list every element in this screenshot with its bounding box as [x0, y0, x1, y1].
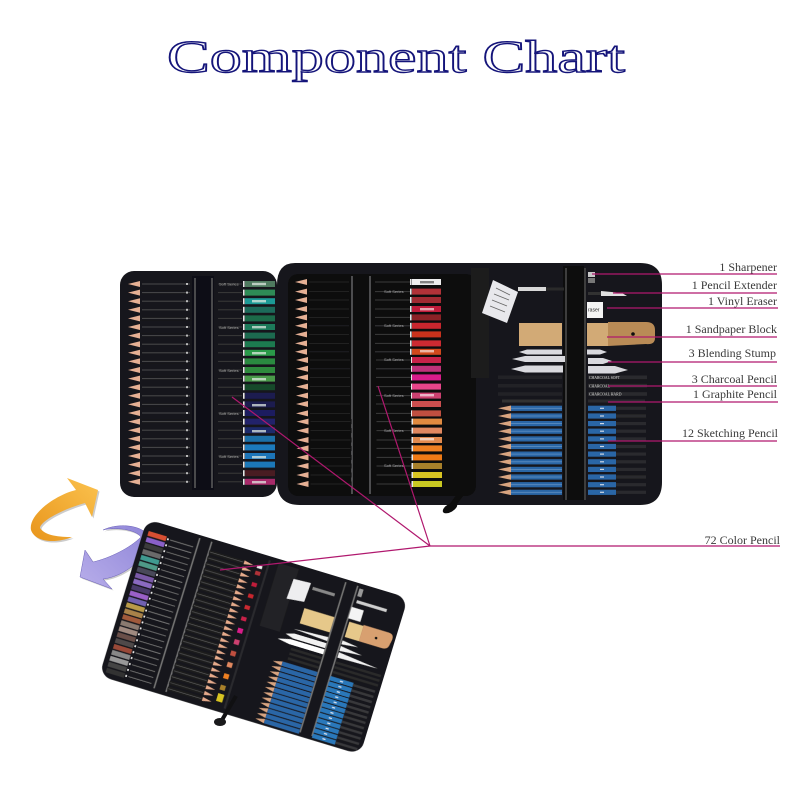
pocket strip — [471, 268, 489, 378]
labels: 72 Color Pencil — [705, 533, 781, 547]
connector lines: components — [592, 274, 778, 441]
color ends at spine — [216, 565, 264, 703]
charcoal pencils — [498, 376, 647, 397]
blending stumps — [277, 622, 383, 671]
panel: center and right pages: Soft Series — [384, 323, 404, 328]
panel: angled view of closed-flap case — [99, 519, 408, 755]
panel: center and right pages: Soft Series — [384, 463, 404, 468]
panel: left color pencil page: Soft Series — [219, 368, 239, 373]
vinyl eraser: raser — [588, 308, 600, 314]
panel: center and right pages: Soft Series — [384, 289, 404, 294]
panel: left color pencil page — [120, 271, 277, 497]
charcoal pencils: CHARCOAL HARD — [589, 393, 622, 397]
vinyl eraser — [587, 302, 603, 318]
blending stumps — [511, 350, 628, 374]
charcoal pencils: CHARCOAL SOFT — [589, 376, 621, 380]
charcoal pencils — [288, 648, 381, 687]
labels: 12 Sketching Pencil — [682, 426, 779, 440]
labels: 1 Pencil Extender — [692, 278, 777, 292]
panel: center and right pages: Soft Series — [384, 357, 404, 362]
labels: 1 Sandpaper Block — [686, 322, 777, 336]
zipper pull on angled case — [214, 696, 236, 726]
panel: open pencil case, large view — [120, 263, 662, 515]
labels: 3 Charcoal Pencil — [692, 372, 778, 386]
pencil extender left — [518, 287, 564, 291]
panel: center and right pages — [277, 263, 662, 515]
labels: 1 Vinyl Eraser — [708, 294, 777, 308]
sketching pencils — [498, 406, 646, 495]
zipper pull — [449, 473, 467, 510]
pencil extender — [312, 587, 335, 596]
sandpaper block — [519, 322, 655, 346]
labels — [682, 260, 781, 547]
labels: 1 Graphite Pencil — [693, 387, 778, 401]
extender right — [356, 600, 387, 612]
panel: center and right pages: Soft Series — [384, 428, 404, 433]
labels: 3 Blending Stump — [689, 346, 776, 360]
instruction card — [287, 578, 311, 604]
pencil extender right — [588, 291, 627, 296]
icon: purple curved arrow — [80, 526, 150, 590]
sharpener — [588, 272, 595, 283]
icon: orange curved arrow — [31, 478, 99, 543]
panel: left color pencil page: Soft Series — [219, 325, 239, 330]
connector lines: 72 color pencil — [220, 386, 780, 570]
panel: left color pencil page: Soft Series — [219, 454, 239, 459]
pencils: left page — [125, 537, 254, 704]
sketching pencils — [255, 659, 376, 751]
graphite pencil — [502, 400, 645, 402]
panel: left color pencil page: Soft Series — [219, 282, 239, 286]
panel: center and right pages: Soft Series — [384, 393, 404, 398]
sandpaper block — [300, 607, 394, 650]
title: Component Chart — [167, 31, 625, 82]
eraser — [348, 607, 364, 622]
charcoal pencils: CHARCOAL — [589, 384, 611, 388]
sharpener — [357, 588, 364, 597]
elastic bands — [563, 266, 584, 500]
labels: 1 Sharpener — [719, 260, 777, 274]
swatches: left color pencils — [106, 531, 167, 678]
instruction card — [482, 280, 518, 323]
panel: left color pencil page: Soft Series — [219, 411, 239, 416]
